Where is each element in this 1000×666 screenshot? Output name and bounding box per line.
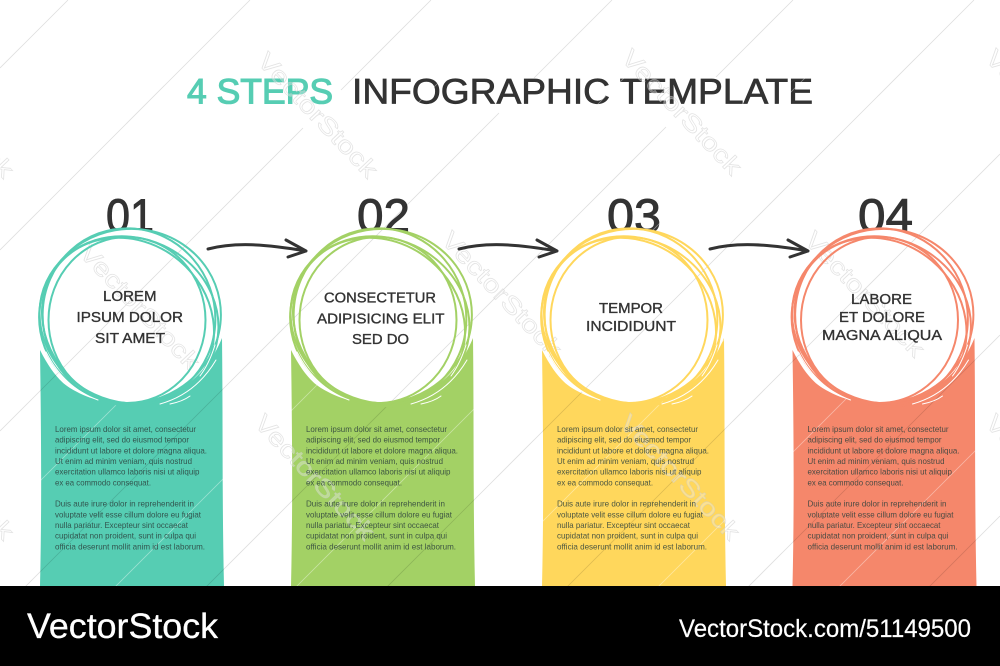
step 2 body text — [306, 424, 458, 551]
step 3 body text: Lorem ipsum dolor sit amet, consectetur — [557, 424, 698, 434]
watermark text: VectorStock — [614, 410, 746, 547]
step 2 label — [317, 290, 445, 348]
step 3 body text: incididunt ut labore et dolore magna aliqua. — [557, 445, 709, 455]
step 1 body text: Duis aute irure dolor in reprehenderit in — [55, 499, 194, 509]
title: INFOGRAPHIC TEMPLATE — [352, 72, 813, 112]
step 3 body text: adipiscing elit, sed do eiusmod tempor — [557, 435, 691, 445]
step 2 label: SED DO — [352, 332, 409, 348]
panel: step 3 colour block — [542, 338, 726, 586]
watermark text: VectorStock — [74, 240, 206, 377]
panel: step 1 colour block — [40, 338, 224, 586]
step 1 body text: incididunt ut labore et dolore magna aliqua. — [55, 445, 207, 455]
sketched circle: step 4 — [760, 203, 1000, 441]
step 2 body text: cupidatat non proident, sunt in culpa qui — [306, 531, 447, 541]
arrow: step 2 to 3 — [459, 240, 557, 257]
step 2 body text: Ut enim ad minim veniam, quis nostrud — [306, 456, 443, 466]
step 2 body text: voluptate velit esse cillum dolore eu fugiat — [306, 509, 453, 519]
step 1 body text: Lorem ipsum dolor sit amet, consectetur — [55, 424, 196, 434]
step 4 label: LABORE — [851, 292, 912, 308]
step 2 body text: ex ea commodo consequat. — [306, 477, 402, 487]
step 2 body text: officia deserunt mollit anim id est laborum. — [306, 541, 456, 551]
footer bar: VectorStock.com/51149500 — [679, 615, 971, 643]
sketched circle: step 1 — [8, 203, 248, 441]
title — [187, 72, 813, 112]
step 3 label: INCIDIDUNT — [586, 319, 676, 335]
footer bar: VectorStock — [27, 607, 219, 646]
step 1 body text: cupidatat non proident, sunt in culpa qui — [55, 531, 196, 541]
step 4 body text: exercitation ullamco laboris nisi ut aliquip — [808, 467, 952, 477]
title: 4 STEPS — [187, 72, 333, 112]
step 3 body text: Duis aute irure dolor in reprehenderit in — [557, 499, 696, 509]
step numbers: 02 — [357, 189, 410, 242]
step 1 body text — [55, 424, 207, 551]
step 1 body text: voluptate velit esse cillum dolore eu fugiat — [55, 509, 202, 519]
step 2 body text: nulla pariatur. Excepteur sint occaecat — [306, 520, 440, 530]
step 3 label — [586, 301, 676, 335]
step 2 label: CONSECTETUR — [324, 290, 436, 306]
step 1 label: SIT AMET — [95, 331, 165, 347]
step 4 body text: voluptate velit esse cillum dolore eu fugiat — [808, 509, 954, 519]
panel: step 2 colour block — [291, 338, 475, 586]
watermark text: VectorStock — [249, 410, 381, 547]
step 3 body text: nulla pariatur. Excepteur sint occaecat — [557, 520, 691, 530]
step numbers: 01 — [106, 189, 154, 242]
watermark text: VectorStock — [799, 227, 931, 364]
footer bar — [0, 586, 1000, 666]
step 2 body text: Lorem ipsum dolor sit amet, consectetur — [306, 424, 447, 434]
step 3 body text: voluptate velit esse cillum dolore eu fugiat — [557, 509, 704, 519]
step 4 body text — [808, 424, 960, 551]
arrow: step 3 to 4 — [710, 240, 808, 257]
step 4 body text: ex ea commodo consequat. — [808, 477, 904, 487]
step 4 body text: Duis aute irure dolor in reprehenderit in — [808, 499, 947, 509]
step 4 body text: officia deserunt mollit anim id est laborum. — [808, 541, 958, 551]
step 4 body text: nulla pariatur. Excepteur sint occaecat — [808, 520, 941, 530]
step 3 body text: exercitation ullamco laboris nisi ut aliquip — [557, 467, 702, 477]
panel: step 4 colour block — [792, 338, 976, 586]
step 2 label: ADIPISICING ELIT — [317, 312, 445, 328]
step 2 body text: exercitation ullamco laboris nisi ut aliquip — [306, 467, 451, 477]
step 1 body text: officia deserunt mollit anim id est laborum. — [55, 541, 205, 551]
sketched circle: step 3 — [510, 203, 750, 441]
step 3 label: TEMPOR — [599, 301, 663, 317]
step numbers: 03 — [607, 189, 661, 242]
step 2 body text: Duis aute irure dolor in reprehenderit in — [306, 499, 445, 509]
step 1 body text: nulla pariatur. Excepteur sint occaecat — [55, 520, 189, 530]
step 4 label: ET DOLORE — [839, 310, 925, 326]
step numbers: 04 — [858, 189, 913, 242]
step 1 body text: adipiscing elit, sed do eiusmod tempor — [55, 435, 189, 445]
step 4 body text: adipiscing elit, sed do eiusmod tempor — [808, 435, 942, 445]
step 1 label — [76, 289, 183, 347]
step 3 body text: cupidatat non proident, sunt in culpa qui — [557, 531, 698, 541]
step numbers — [106, 189, 913, 242]
white circle backings — [40, 229, 972, 403]
step 3 body text: Ut enim ad minim veniam, quis nostrud — [557, 456, 694, 466]
watermark text: VectorStock — [616, 45, 748, 182]
step 4 body text: incididunt ut labore et dolore magna aliqua. — [808, 445, 960, 455]
step 2 body text: incididunt ut labore et dolore magna aliqua. — [306, 445, 458, 455]
sketched circle: step 2 — [259, 203, 499, 441]
step 1 body text: Ut enim ad minim veniam, quis nostrud — [55, 456, 192, 466]
arrow: step 1 to 2 — [208, 240, 306, 257]
watermark text — [0, 45, 1000, 547]
step 4 body text: Lorem ipsum dolor sit amet, consectetur — [808, 424, 949, 434]
step 3 body text: officia deserunt mollit anim id est laborum. — [557, 541, 707, 551]
step 1 label: IPSUM DOLOR — [76, 310, 183, 326]
step 4 body text: Ut enim ad minim veniam, quis nostrud — [808, 456, 945, 466]
step 4 label — [822, 292, 942, 344]
step 3 body text: ex ea commodo consequat. — [557, 477, 653, 487]
watermark text: VectorStock — [436, 227, 568, 364]
watermark text: VectorStock — [252, 48, 384, 185]
step 1 body text: ex ea commodo consequat. — [55, 477, 151, 487]
step 1 body text: exercitation ullamco laboris nisi ut aliquip — [55, 467, 200, 477]
step 4 label: MAGNA ALIQUA — [822, 328, 942, 344]
step 1 label: LOREM — [103, 289, 156, 305]
step 2 body text: adipiscing elit, sed do eiusmod tempor — [306, 435, 440, 445]
step 3 body text — [557, 424, 709, 551]
step 4 body text: cupidatat non proident, sunt in culpa qui — [808, 531, 949, 541]
